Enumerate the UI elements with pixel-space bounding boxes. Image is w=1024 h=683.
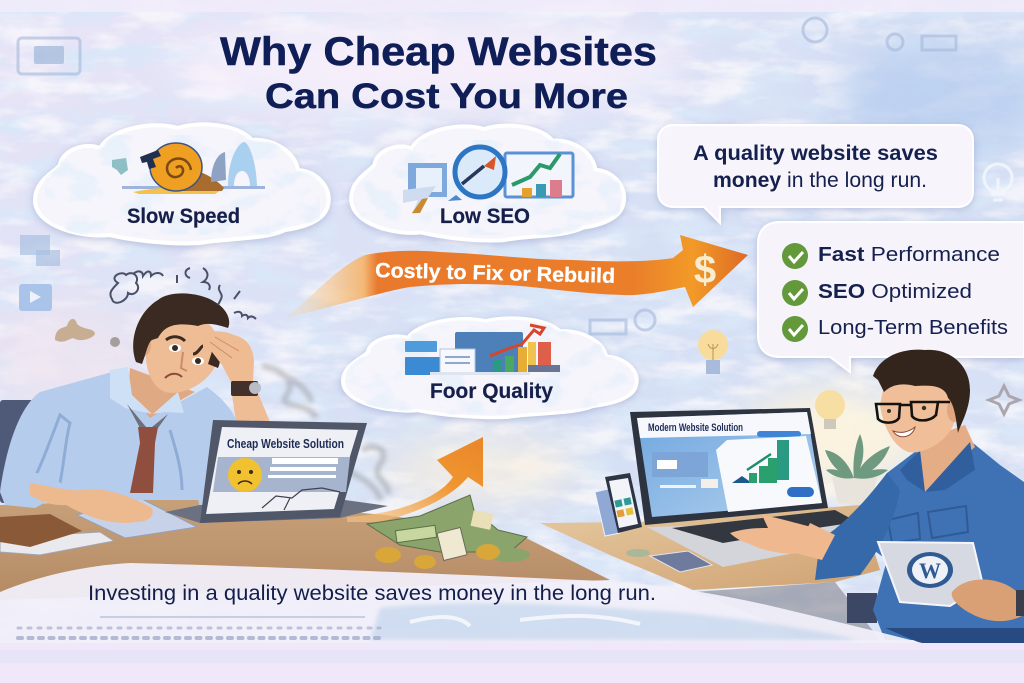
top lavender band — [0, 0, 1024, 12]
hair — [133, 293, 229, 368]
collar — [110, 367, 184, 414]
chart — [732, 440, 789, 483]
icon: smartphone — [605, 473, 642, 533]
benefit: fast performance — [782, 243, 1000, 269]
icon: sparkle — [989, 386, 1019, 414]
icon: dashboard and chart — [405, 325, 560, 375]
icon: light bulb top right — [984, 164, 1012, 200]
glasses — [876, 402, 950, 423]
cloud: Slow Speed — [35, 124, 329, 243]
hand on pad — [30, 483, 153, 523]
label: Low SEO: Low SEO — [440, 205, 530, 228]
modern website laptop: Modern Website Solution — [648, 422, 743, 434]
icon: bulb — [815, 390, 845, 429]
watch — [231, 381, 261, 396]
speech bubble: quality message: money in the long run. — [713, 169, 927, 192]
wordpress tablet: W — [919, 558, 941, 583]
note pad — [77, 498, 197, 538]
title — [220, 30, 657, 116]
cheap website laptop — [165, 420, 388, 523]
shirt — [860, 443, 1024, 640]
under-desk shadow — [693, 582, 880, 640]
plant — [825, 434, 890, 503]
arm and hand on head — [232, 393, 270, 422]
shirt — [0, 372, 250, 500]
bottom lavender band — [0, 643, 1024, 683]
speech bubble: quality message — [658, 125, 973, 223]
cheap website laptop: Cheap Website Solution — [227, 437, 344, 451]
neck — [912, 425, 975, 492]
icon: tablet behind phone — [595, 488, 620, 536]
panel: benefits checklist — [758, 222, 1024, 372]
icon: magnifier and chart — [403, 147, 573, 214]
benefit: seo optimized: SEO Optimized — [818, 280, 972, 303]
icon: sad face — [228, 458, 262, 492]
stressed man — [0, 268, 270, 523]
modern website laptop — [630, 408, 860, 567]
neck — [128, 368, 195, 418]
faded smoke wisps — [262, 366, 388, 500]
cloud: Low SEO — [351, 126, 624, 241]
tie — [127, 404, 168, 493]
left desk — [0, 400, 610, 600]
arrow: costly to fix or rebuild: Costly to Fix or Rebuild — [375, 259, 615, 288]
speech bubble: quality message: A quality website saves — [693, 142, 938, 165]
head — [146, 315, 219, 393]
benefit: seo optimized — [782, 280, 972, 306]
arrow: costly to fix or rebuild — [285, 235, 748, 318]
smile — [893, 427, 915, 437]
extended arm — [815, 473, 900, 580]
label: Slow Speed: Slow Speed — [127, 205, 240, 228]
icon: light bulb centre — [698, 330, 728, 374]
sleeve cuff — [0, 472, 68, 508]
right desk — [540, 386, 1019, 590]
title: Why Cheap Websites — [220, 30, 657, 74]
wordpress tablet — [878, 542, 983, 606]
icon: dollar sign: $ — [694, 248, 716, 292]
eyes, brows and mouth — [165, 337, 204, 378]
benefit: fast performance: Fast Performance — [818, 243, 1000, 266]
head — [880, 371, 955, 452]
label: Poor Quality: Foor Quality — [430, 380, 553, 403]
cloud: Poor Quality — [343, 318, 637, 418]
pockets — [888, 506, 968, 543]
bottom banner — [0, 563, 930, 645]
upward arrow with money — [347, 437, 530, 569]
icon: faded video player — [19, 284, 52, 311]
hand holding tablet — [952, 580, 1024, 621]
icon: snail — [112, 142, 265, 194]
icon: stacked books — [0, 514, 114, 555]
benefit: long-term benefits: Long-Term Benefits — [818, 316, 1008, 339]
collar — [900, 442, 975, 492]
extended hand — [730, 515, 812, 554]
benefit: long-term benefits — [782, 316, 1008, 342]
smiling man — [730, 350, 1024, 645]
title: Can Cost You More — [265, 77, 628, 116]
bottom banner: Investing in a quality website saves money in the long run. — [88, 582, 656, 605]
hair — [873, 350, 970, 433]
icon: cash pile — [367, 495, 530, 569]
stress squiggles — [110, 268, 256, 319]
